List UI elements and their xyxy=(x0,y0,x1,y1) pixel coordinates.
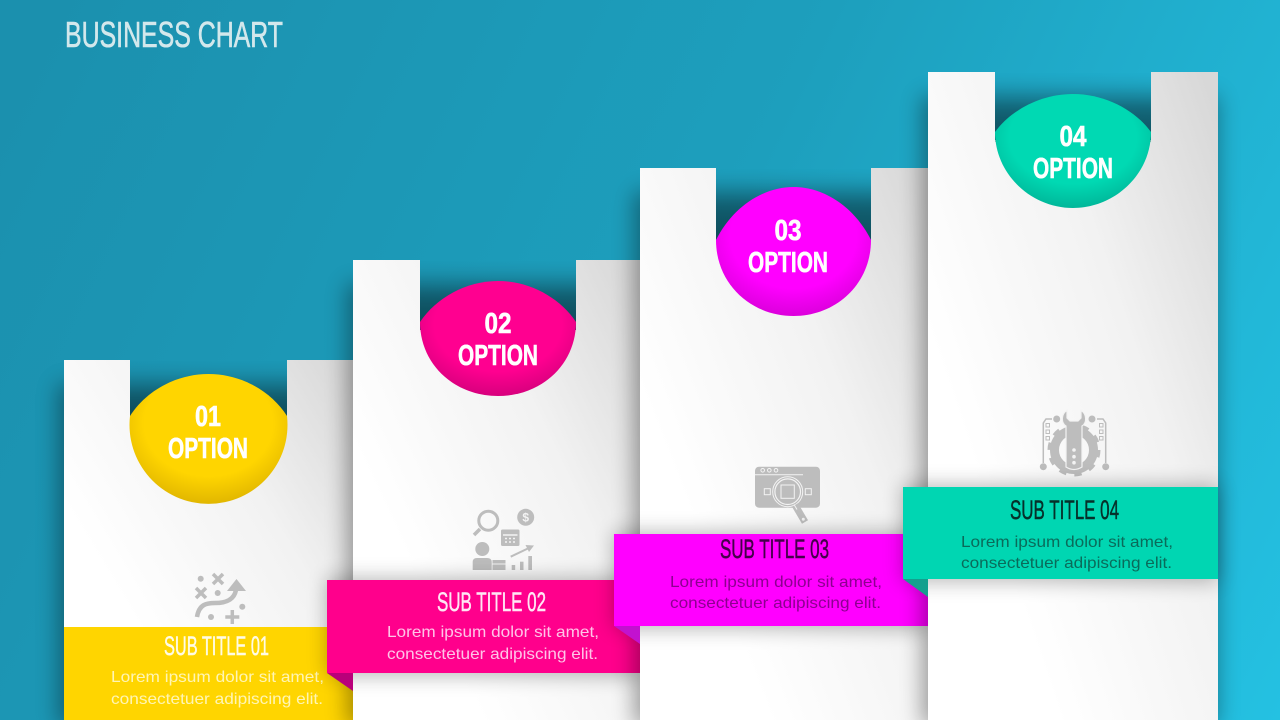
icon: web search xyxy=(755,467,820,522)
band: sub title 02: SUB TITLE 02 xyxy=(437,587,546,617)
badge: 04 option: OPTION xyxy=(1033,153,1113,185)
band: sub title 01: consectetuer adipiscing elit. xyxy=(111,691,323,708)
band: sub title 03: Lorem ipsum dolor sit amet, xyxy=(670,574,882,591)
band: sub title 02: consectetuer adipiscing elit. xyxy=(387,646,598,663)
title: BUSINESS CHART xyxy=(65,14,283,55)
icon: business analysis xyxy=(473,509,534,570)
band: sub title 03 xyxy=(614,534,928,644)
icon: business analysis: $ xyxy=(522,510,529,524)
band shadow 04 xyxy=(903,485,1218,582)
band: sub title 04: SUB TITLE 04 xyxy=(1010,495,1119,525)
band: sub title 04: consectetuer adipiscing elit. xyxy=(961,555,1172,572)
badge: 04 option xyxy=(995,94,1151,208)
badge: 01 option: OPTION xyxy=(168,433,248,465)
badge: 02 option xyxy=(420,281,576,396)
panel: column 04 xyxy=(903,72,1218,720)
icon: strategy play xyxy=(196,574,246,624)
band shadow 03 xyxy=(614,532,928,629)
badge: 03 option xyxy=(716,187,871,316)
band: sub title 03: SUB TITLE 03 xyxy=(720,534,829,564)
badge: 01 option: 01 xyxy=(195,401,221,433)
panel: column 03 xyxy=(614,168,928,720)
band: sub title 01: SUB TITLE 01 xyxy=(164,631,269,661)
band: sub title 04 xyxy=(903,487,1218,597)
badge: 02 option: OPTION xyxy=(458,340,538,372)
panel: column 01 xyxy=(58,360,353,720)
band: sub title 02: Lorem ipsum dolor sit amet, xyxy=(387,624,599,641)
band: sub title 02 xyxy=(327,580,640,691)
band: sub title 03: consectetuer adipiscing elit. xyxy=(670,595,881,612)
band: sub title 01: Lorem ipsum dolor sit amet, xyxy=(111,669,324,686)
panel: column 02 xyxy=(327,260,640,720)
band: sub title 04: Lorem ipsum dolor sit amet, xyxy=(961,534,1173,551)
badge: 02 option: 02 xyxy=(484,308,512,340)
badge: 03 option: OPTION xyxy=(748,247,828,279)
band: sub title 01 xyxy=(64,627,353,720)
icon: wrench and gear xyxy=(1040,410,1109,474)
band shadow 02 xyxy=(327,578,640,676)
badge: 01 option xyxy=(129,374,288,504)
badge: 04 option: 04 xyxy=(1060,121,1086,153)
badge: 03 option: 03 xyxy=(774,215,802,247)
